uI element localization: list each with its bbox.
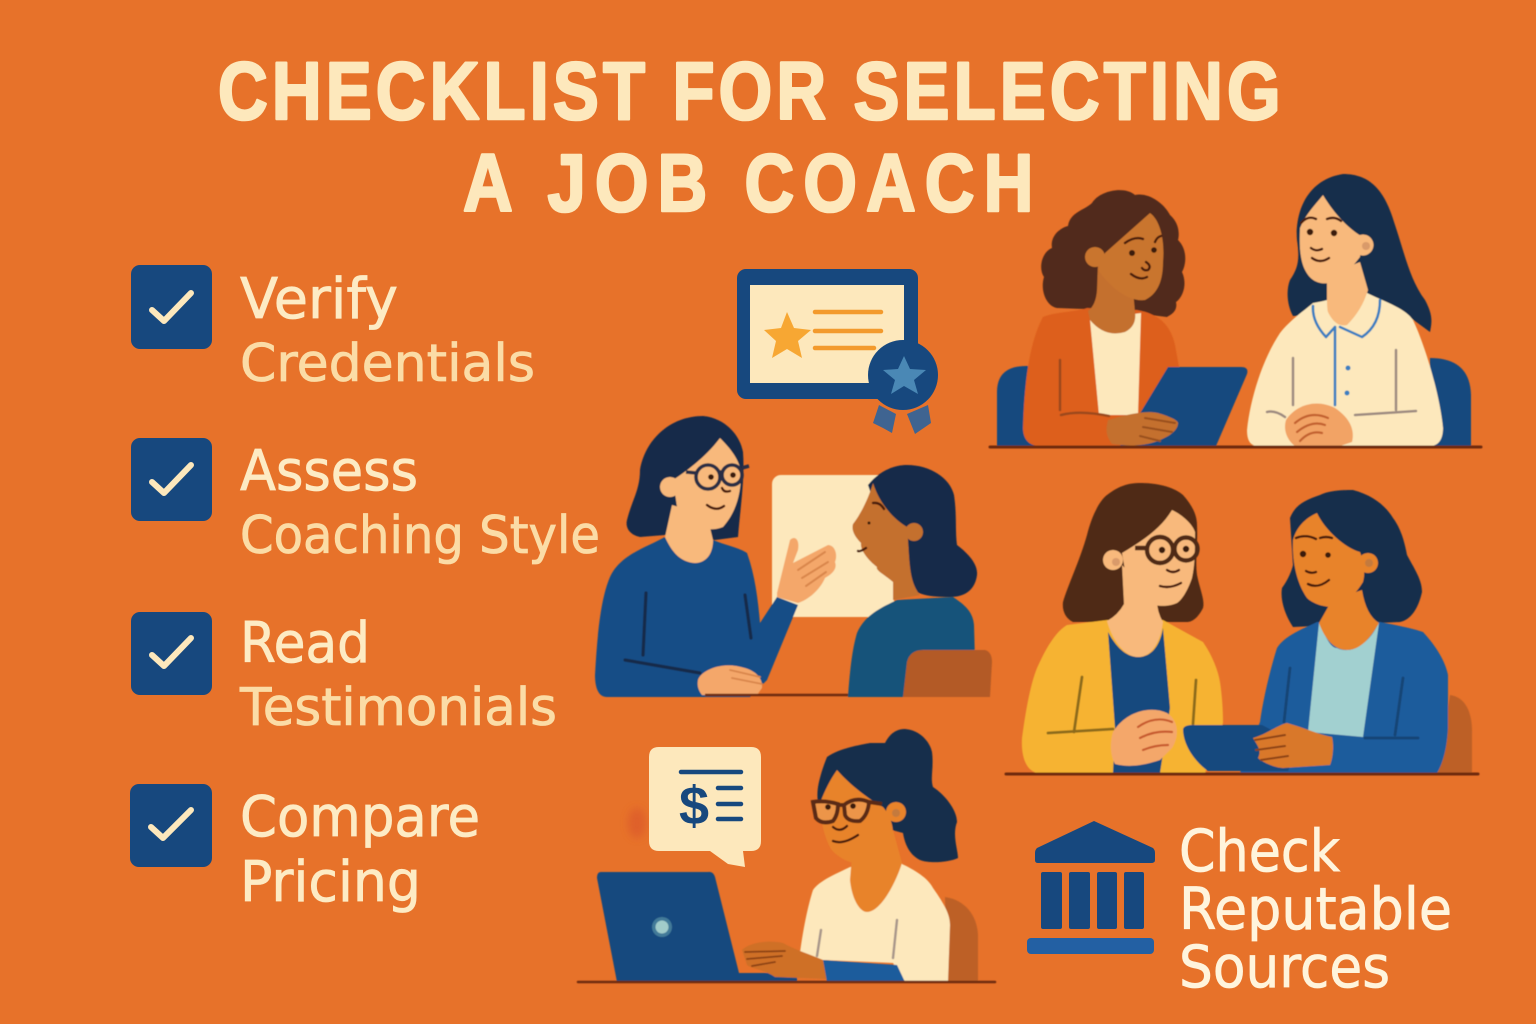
checklist item: verify credentials: Credentials (240, 334, 535, 394)
right woman with long dark hair and white blouse (1247, 174, 1471, 446)
illustration: two women talking at table, top right (990, 174, 1481, 447)
checklist item: compare pricing: Pricing (240, 850, 421, 915)
checklist item: assess coaching style: Assess (240, 439, 418, 504)
checklist item: read testimonials: Read (240, 611, 370, 676)
title: CHECKLIST FOR SELECTING (218, 45, 1281, 137)
woman with ponytail and glasses (742, 729, 958, 982)
illustration: coach with glasses explaining to a client (595, 416, 992, 697)
text: check reputable sources (1179, 817, 1452, 1001)
paper sheet behind (772, 475, 894, 617)
checklist item: read testimonials: Testimonials (239, 678, 557, 738)
checklist item: verify credentials: Verify (240, 267, 398, 332)
checklist item: compare pricing (130, 784, 480, 915)
title: A JOB COACH (463, 137, 1033, 229)
chair (945, 897, 978, 982)
illustration: woman at laptop comparing prices (578, 729, 995, 982)
woman in blue cardigan holding tablet (1183, 490, 1448, 773)
checklist item: assess coaching style: Coaching Style (240, 506, 600, 566)
checklist item: assess coaching style (131, 438, 600, 566)
laptop (597, 872, 797, 982)
client seen in profile (848, 465, 992, 697)
left woman with curly hair (997, 190, 1247, 446)
checklist (130, 265, 600, 915)
icon: institution building (1027, 821, 1155, 954)
text: check reputable sources: Reputable (1179, 875, 1452, 943)
checklist item: verify credentials (131, 265, 535, 394)
icon: pricing speech bubble: $ (679, 776, 709, 836)
woman with glasses in yellow cardigan (1022, 483, 1223, 773)
text: check reputable sources: Check (1179, 817, 1340, 885)
title (218, 45, 1281, 229)
icon: certificate with seal (737, 269, 938, 434)
illustration: two women with tablet, middle right (1006, 483, 1478, 774)
coach with glasses in blue sweater (595, 416, 836, 697)
icon: pricing speech bubble (628, 747, 761, 867)
checklist item: read testimonials (131, 611, 557, 738)
text: check reputable sources: Sources (1179, 933, 1390, 1001)
checklist item: compare pricing: Compare (240, 785, 480, 850)
